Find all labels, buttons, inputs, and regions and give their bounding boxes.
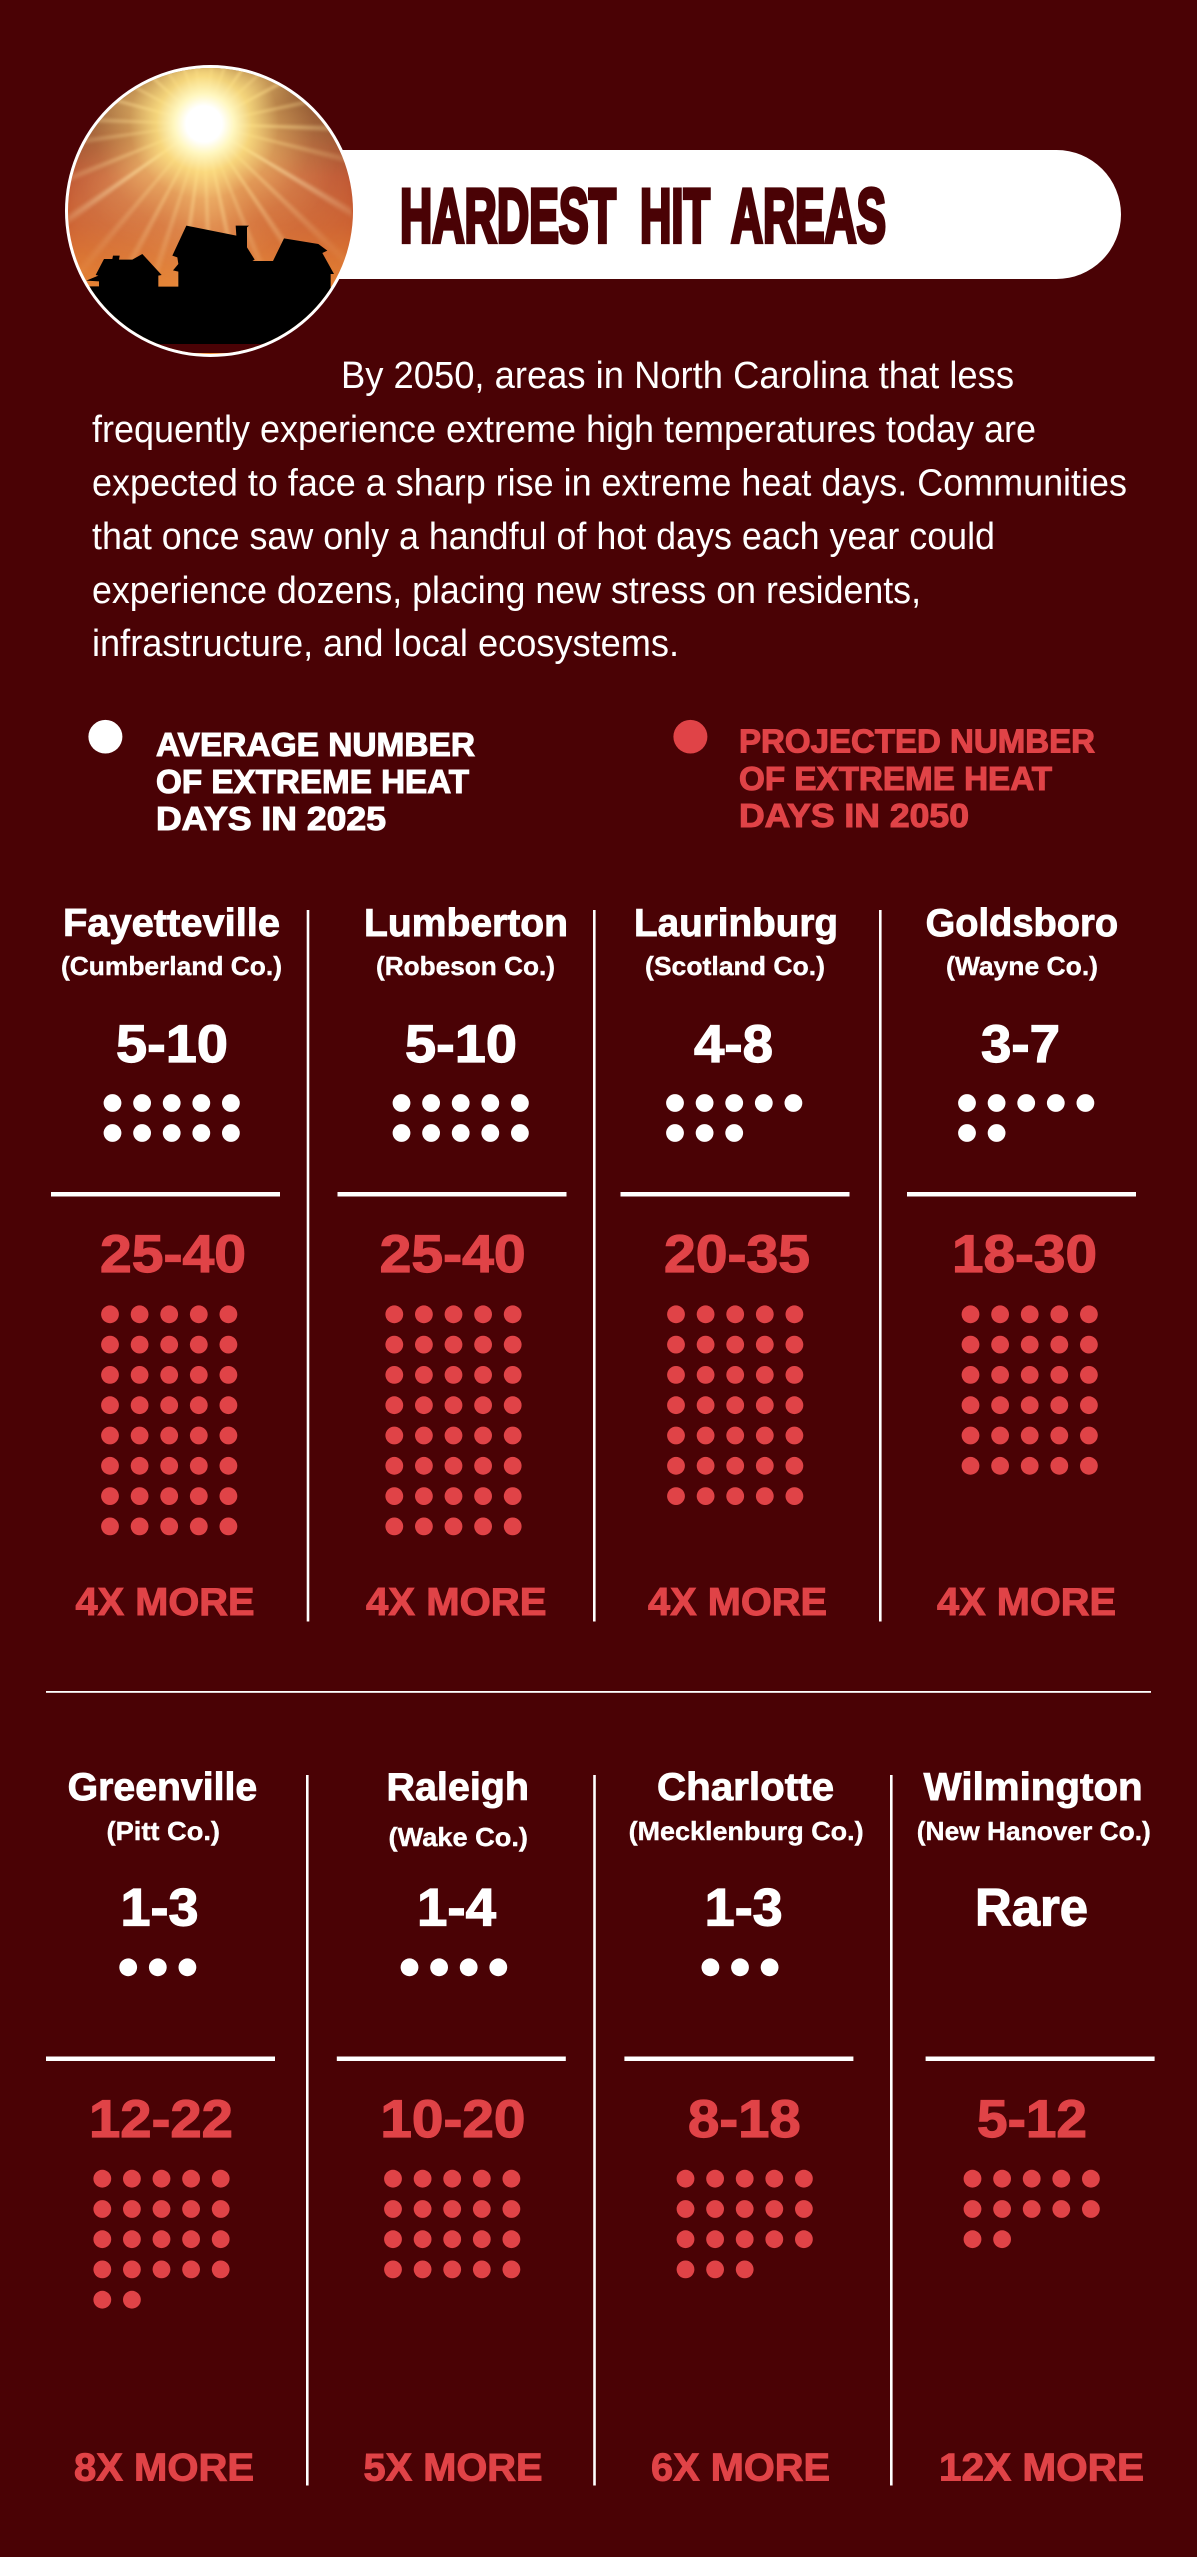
panel: Lumberton — [338, 902, 568, 1624]
panel: Goldsboro: 3-7 — [981, 1015, 1060, 1074]
legend: 2025 — [88, 720, 475, 838]
title: AREAS — [731, 174, 886, 259]
title banner pill — [300, 150, 1121, 279]
legend: 2025: AVERAGE NUMBER — [156, 727, 475, 764]
panel: Raleigh: 10-20 — [380, 2090, 525, 2149]
panel: Greenville: 12-22 — [89, 2090, 233, 2149]
panel: Charlotte: 6X MORE — [651, 2447, 830, 2490]
legend: 2050 — [673, 720, 1095, 835]
title: HARDEST — [400, 174, 616, 259]
panel: Laurinburg: Laurinburg — [634, 902, 838, 945]
panel: Fayetteville: 5-10 — [116, 1015, 228, 1074]
panel: Fayetteville: 4X MORE — [76, 1581, 255, 1624]
panel: Greenville: 8X MORE — [74, 2447, 254, 2490]
intro paragraph: frequently experience extreme high temperatures today are — [92, 409, 1036, 451]
intro paragraph: By 2050, areas in North Carolina that less — [341, 355, 1014, 397]
panel: Wilmington: 5-12 — [977, 2090, 1087, 2149]
panel: Laurinburg: (Scotland Co.) — [645, 951, 825, 981]
icon: sun over house silhouettes — [65, 65, 356, 357]
panel: Lumberton: 5-10 — [405, 1015, 517, 1074]
panel: Greenville — [46, 1766, 275, 2490]
title: HIT — [640, 174, 710, 259]
panel: Goldsboro: Goldsboro — [926, 902, 1118, 945]
panel: Wilmington: (New Hanover Co.) — [917, 1816, 1151, 1846]
panel: Lumberton: 25-40 — [380, 1225, 526, 1284]
legend: 2050: PROJECTED NUMBER — [739, 724, 1095, 761]
intro paragraph: experience dozens, placing new stress on residents, — [92, 570, 921, 612]
panel: Greenville: Greenville — [68, 1766, 257, 1809]
panel: Wilmington: Rare — [975, 1879, 1088, 1938]
panel: Charlotte: 8-18 — [688, 2090, 801, 2149]
panel: Charlotte: Charlotte — [657, 1766, 834, 1809]
legend: 2050: OF EXTREME HEAT — [739, 761, 1053, 798]
panel: Fayetteville: Fayetteville — [63, 902, 280, 945]
intro paragraph: infrastructure, and local ecosystems. — [92, 623, 679, 665]
panel: Laurinburg: 4X MORE — [648, 1581, 827, 1624]
panel: Greenville: (Pitt Co.) — [106, 1816, 220, 1846]
panel: Laurinburg — [620, 902, 850, 1624]
panel: Fayetteville — [51, 902, 282, 1624]
legend: 2025: DAYS IN 2025 — [156, 801, 386, 838]
panel: Fayetteville: 25-40 — [100, 1225, 246, 1284]
panel: Lumberton: 4X MORE — [366, 1581, 546, 1624]
panel: Wilmington — [917, 1766, 1155, 2490]
panel: Raleigh: 1-4 — [417, 1879, 497, 1938]
panel: Wilmington: 12X MORE — [939, 2447, 1144, 2490]
intro paragraph — [92, 355, 1127, 665]
panel: Fayetteville: (Cumberland Co.) — [61, 951, 282, 981]
panel: Lumberton: (Robeson Co.) — [376, 951, 555, 981]
panel: Laurinburg: 20-35 — [664, 1225, 810, 1284]
panel: Charlotte: (Mecklenburg Co.) — [629, 1816, 864, 1846]
legend: 2025: OF EXTREME HEAT — [156, 764, 470, 801]
legend: 2050: DAYS IN 2050 — [739, 798, 969, 835]
panel: Raleigh — [337, 1766, 566, 2490]
panel: Goldsboro: (Wayne Co.) — [946, 951, 1098, 981]
panel: Raleigh: Raleigh — [386, 1766, 529, 1809]
panel: Goldsboro: 4X MORE — [937, 1581, 1116, 1624]
panel: Charlotte: 1-3 — [705, 1879, 783, 1938]
intro paragraph: that once saw only a handful of hot days each year could — [92, 516, 995, 558]
intro paragraph: expected to face a sharp rise in extreme heat days. Communities — [92, 462, 1127, 504]
panel: Goldsboro: 18-30 — [952, 1225, 1097, 1284]
panel: Wilmington: Wilmington — [924, 1766, 1143, 1809]
panel: Laurinburg: 4-8 — [694, 1015, 773, 1074]
panel: Raleigh: (Wake Co.) — [388, 1822, 528, 1852]
panel: Raleigh: 5X MORE — [364, 2447, 542, 2490]
panel: Goldsboro — [907, 902, 1136, 1624]
panel: Charlotte — [624, 1766, 864, 2490]
panel: Lumberton: Lumberton — [364, 902, 568, 945]
panel: Greenville: 1-3 — [120, 1879, 198, 1938]
